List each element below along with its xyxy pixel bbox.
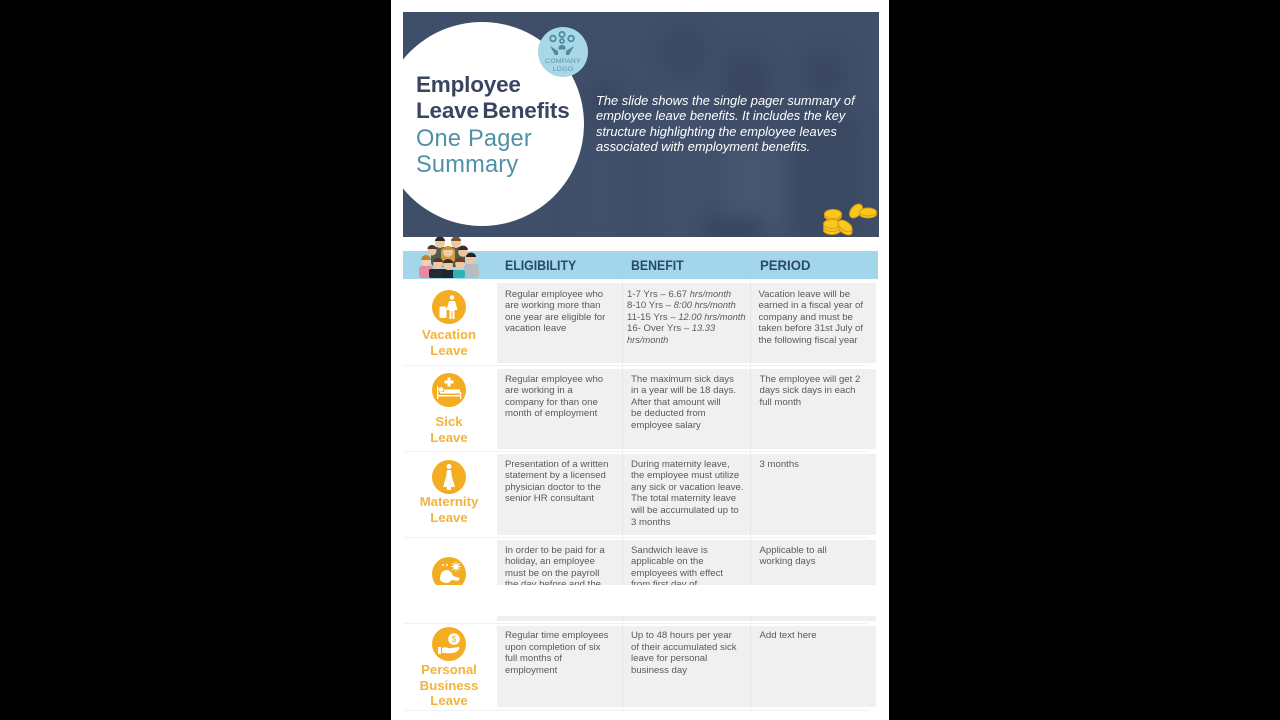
holiday benefit text: Sandwich leave is [631,544,708,556]
sick benefit text: in a year will be 18 days. [631,385,736,396]
label: maternity leave [420,494,478,524]
column heading: eligibility: ELIGIBILITY [505,257,576,273]
vacation benefit text: 8-10 Yrs – 8:00 hrs/month [627,300,736,311]
period cell [750,454,876,535]
eligibility cell [497,369,622,449]
row: personal business leave cells [497,626,876,707]
period cell [750,283,876,363]
icon: personal business leave [432,627,466,661]
sick eligibility text: are working in a [505,385,573,396]
vacation benefit text: 1-7 Yrs – 6.67 hrs/month [627,288,731,300]
banner description: structure highlighting the employee leaves [596,124,837,139]
vacation period text: company and must be [758,312,853,323]
personal benefit text: leave for personal [631,653,707,664]
icon: company logo [538,27,588,77]
title: Leave Benefits [416,98,570,123]
label: sick leave [430,414,468,444]
label: vacation leave [422,327,476,358]
holiday benefit text: employees with effect [631,568,723,579]
icon: holiday leave [432,557,466,585]
period cell [750,540,876,621]
maternity benefit text: any sick or vacation leave. [631,482,744,493]
personal eligibility text: full months of [505,653,562,664]
maternity period text: 3 months [760,458,799,470]
sick period text [760,374,860,408]
vacation period text: taken before 31st July of [758,323,863,334]
holiday period text [760,544,827,567]
maternity benefit text: 3 months [631,517,670,528]
personal period text: Add text here [760,630,817,641]
vacation period text: Vacation leave will be [758,288,850,300]
vacation benefit text [627,288,746,345]
title: One Pager [416,126,532,152]
sick benefit text: employee salary [631,420,701,431]
holiday eligibility text [505,544,605,590]
vacation benefit text: hrs/month [627,335,668,345]
banner photo: blurred group of people [597,46,846,236]
benefit cell [622,454,750,535]
personal eligibility text: upon completion of six [505,642,600,653]
maternity eligibility text [505,458,608,504]
eligibility cell [497,283,622,363]
maternity eligibility text: statement by a licensed [505,470,606,481]
icon: personal business leave: $ [452,635,457,644]
maternity eligibility text: physician doctor to the [505,482,601,493]
white glitch band covering the holiday row [391,585,889,616]
title: Employee [416,72,521,96]
maternity benefit text: the employee must utilize [631,470,739,481]
icon: company logo: LOGO [553,66,573,73]
holiday benefit text: from first day of [631,579,697,590]
holiday benefit text [631,544,723,590]
row: sick leave cells [497,369,876,449]
vacation period text: the following fiscal year [758,335,858,346]
label: personal business leave: Personal [421,662,477,677]
table header band [403,251,878,279]
vacation eligibility text [505,288,606,334]
label: maternity leave: Leave [430,510,468,524]
benefit cell [622,626,750,707]
sick eligibility text: Regular employee who [505,374,603,384]
vacation benefit text: 16- Over Yrs – 13.33 [627,323,715,334]
maternity eligibility text: Presentation of a written [505,458,608,470]
label: personal business leave: Business [420,678,478,692]
maternity benefit text: During maternity leave, [631,458,730,470]
holiday eligibility text: the day before and the [505,579,601,590]
title [416,72,570,178]
period cell [750,369,876,449]
icon: group of employees [419,237,479,278]
icon: company logo: COMPANY [545,58,581,65]
vacation benefit text: 11-15 Yrs – 12.00 hrs/month [627,312,746,323]
maternity eligibility text: senior HR consultant [505,493,594,504]
benefit cell [622,369,750,449]
label: personal business leave [420,662,478,708]
sick benefit text: The maximum sick days [631,374,734,384]
sick benefit text [631,374,736,431]
banner description: employee leave benefits. It includes the key [596,108,845,123]
column heading: period: PERIOD [760,257,810,273]
banner description: associated with employment benefits. [596,139,810,154]
personal eligibility text: employment [505,665,557,676]
banner description [596,93,856,154]
holiday eligibility text: holiday, an employee [505,556,595,567]
sick benefit text: be deducted from [631,408,706,419]
sick period text: The employee will get 2 [760,374,860,384]
holiday benefit text: applicable on the [631,556,704,567]
sick benefit text: After that amount will [631,397,721,408]
personal benefit text: Up to 48 hours per year [631,630,732,641]
maternity benefit text: will be accumulated up to [631,505,739,516]
holiday period text: Applicable to all [760,544,827,556]
icon: maternity leave [432,460,466,494]
label: sick leave: Sick [435,414,463,429]
label: sick leave: Leave [430,430,468,444]
column heading: benefit: BENEFIT [631,257,684,273]
period cell [750,626,876,707]
benefit cell [622,540,750,621]
personal benefit text: of their accumulated sick [631,642,737,653]
vacation eligibility text: vacation leave [505,323,566,334]
icon: sick leave [432,373,466,407]
benefit cell [622,283,750,363]
vacation eligibility text: one year are eligible for [505,312,605,323]
vacation eligibility text: Regular employee who [505,288,603,300]
label: personal business leave: Leave [430,693,468,708]
row: holiday leave cells [497,540,876,621]
maternity benefit text [631,458,744,528]
label: vacation leave: Vacation [422,327,476,342]
vacation period text: earned in a fiscal year of [758,300,863,311]
holiday eligibility text: In order to be paid for a [505,544,605,556]
label: maternity leave: Maternity [420,494,478,509]
page sheet [391,0,889,720]
white title circle [380,22,584,226]
eligibility cell [497,540,622,621]
sick eligibility text [505,374,603,419]
eligibility cell [497,626,622,707]
sick period text: full month [760,397,801,408]
sick period text: days sick days in each [760,385,855,396]
banner description: The slide shows the single pager summary of [596,93,855,108]
eligibility cell [497,454,622,535]
icon: gold coins [823,204,877,236]
personal eligibility text: Regular time employees [505,630,608,641]
label: vacation leave: Leave [430,342,468,358]
panel: header banner [403,12,879,237]
sick eligibility text: month of employment [505,408,597,419]
maternity benefit text: The total maternity leave [631,493,736,504]
vacation eligibility text: are working more than [505,300,600,311]
icon: vacation leave [432,290,466,324]
row: vacation leave cells [497,283,876,363]
personal benefit text: business day [631,665,687,676]
holiday eligibility text: must be on the payroll [505,568,599,579]
personal benefit text [631,630,737,676]
title: Summary [416,152,518,178]
vacation period text [758,288,864,346]
personal eligibility text [505,630,608,676]
row: maternity leave cells [497,454,876,535]
holiday period text: working days [760,556,816,567]
sick eligibility text: company for than one [505,397,598,408]
